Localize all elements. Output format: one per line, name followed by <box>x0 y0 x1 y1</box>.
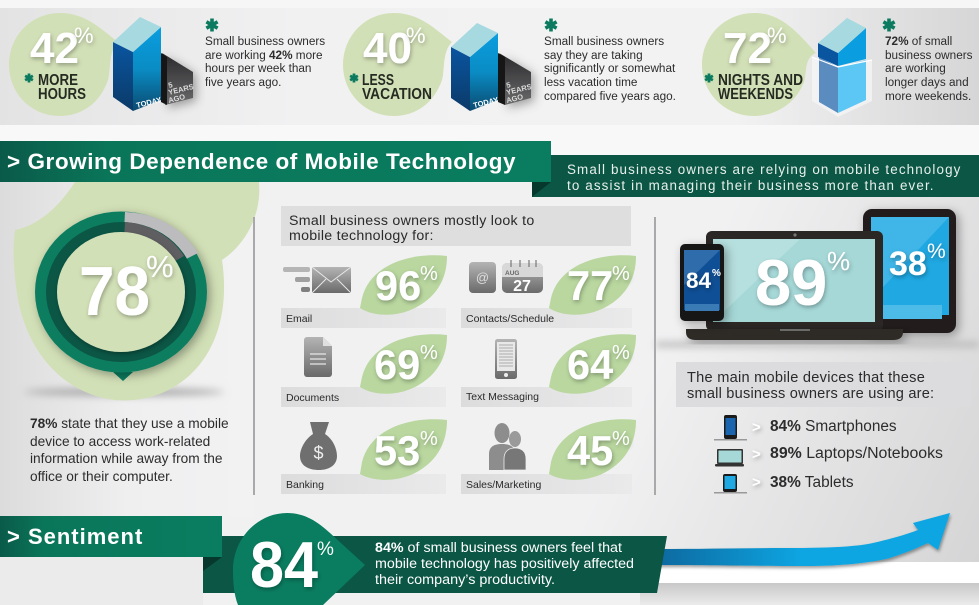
stat: 72% nights and weekends: 72 <box>723 24 772 73</box>
text: 72% explanation: longer days and <box>885 76 969 89</box>
illustration: smartphone 84%: % <box>712 268 721 279</box>
list item: laptops: > <box>752 446 761 463</box>
text: 78% explanation: device to access work-related <box>30 434 210 449</box>
text: 40% explanation: Small business owners <box>544 35 664 48</box>
stat: 40% less vacation: 40 <box>363 24 412 73</box>
item: contacts and schedule 77%: Contacts/Schedule <box>466 313 554 325</box>
icon: document <box>304 337 332 377</box>
stat: 40% less vacation: % <box>406 23 426 48</box>
item: documents 69% <box>281 334 447 407</box>
callout band: 84% productivity: 84 <box>250 528 318 601</box>
donut chart: 78 percent: % <box>146 249 174 284</box>
icon: money bag <box>300 422 337 470</box>
panel heading: main mobile devices: small business owners are using are: <box>687 386 934 402</box>
stat: 42% more hours: % <box>74 23 94 48</box>
item: sales and marketing 45%: % <box>612 428 630 450</box>
shadow strip under devices <box>656 342 979 347</box>
illustration: laptop 89% <box>686 231 903 340</box>
item: banking 53% <box>281 419 447 494</box>
item: contacts and schedule 77%: 77 <box>567 262 613 309</box>
bar chart: 40% today vs 5 years ago: 5 <box>505 80 512 90</box>
illustration: smartphone 84% <box>680 244 724 321</box>
stat: 72% nights and weekends <box>702 13 816 116</box>
item: sales and marketing 45%: 45 <box>567 427 613 474</box>
panel: 78% mobile access <box>14 182 259 484</box>
item: text messaging 64% <box>461 334 636 407</box>
bar chart: 42% today vs 5 years ago: YEARS <box>167 82 195 97</box>
item: documents 69%: Documents <box>286 392 339 404</box>
bar chart: 40% today vs 5 years ago: AGO <box>505 92 524 105</box>
item: text messaging 64%: % <box>612 342 630 364</box>
panel heading: main mobile devices <box>676 362 971 407</box>
bar chart: 40% today vs 5 years ago <box>451 23 533 111</box>
text: 40% explanation: compared five years ago. <box>544 90 676 103</box>
item: banking 53%: % <box>420 428 438 450</box>
icon: address book <box>469 262 496 293</box>
illustration: tablet 38%: % <box>927 240 946 263</box>
heading: sentiment: > Sentiment <box>7 524 143 549</box>
stat: 42% more hours: MORE <box>38 72 78 89</box>
list item: smartphones: > <box>752 419 761 436</box>
item: email 96%: Email <box>286 313 312 325</box>
icon: calendar: 27 <box>513 278 531 295</box>
panel heading: mostly look to mobile technology for: mobile technology for: <box>289 228 434 244</box>
text: 78% explanation: office or their computer. <box>30 469 173 484</box>
item: email 96% <box>281 255 447 328</box>
bar chart: 42% today vs 5 years ago: TODAY <box>135 95 162 110</box>
list item: tablets: 38% Tablets <box>770 474 854 491</box>
icon: envelope <box>283 267 351 293</box>
icon: phone <box>495 339 517 379</box>
stat: 72% nights and weekends: % <box>767 23 787 48</box>
stat: 40% less vacation: VACATION <box>362 86 432 103</box>
bar chart: 40% today vs 5 years ago: TODAY <box>472 95 499 110</box>
item: documents 69%: % <box>420 342 438 364</box>
illustration: laptop 89%: 89 <box>755 246 827 319</box>
arrow: rising blue <box>655 513 950 566</box>
panel heading: mostly look to mobile technology for: Small business owners mostly look to <box>289 213 534 229</box>
donut chart: 78 percent <box>35 212 207 381</box>
item: text messaging 64%: 64 <box>567 341 613 388</box>
stat: 40% less vacation: LESS <box>362 72 394 89</box>
list item: tablets <box>714 474 854 494</box>
bar chart: 40% today vs 5 years ago: YEARS <box>505 82 533 97</box>
heading: growing dependence of mobile technology: > Growing Dependence of Mobile Technology <box>7 149 516 174</box>
text: 40% explanation: significantly or somewhat <box>544 62 676 75</box>
text: 42% explanation: hours per week than <box>205 62 311 75</box>
item: documents 69%: 69 <box>374 341 420 388</box>
illustration: tablet 38%: 38 <box>889 245 927 283</box>
icon: calendar <box>502 260 543 295</box>
illustration: tablet 38% <box>863 209 956 333</box>
text: 42% explanation: are working 42% more <box>205 49 323 62</box>
stat: 72% nights and weekends: WEEKENDS <box>718 86 793 103</box>
text: 72% explanation: more weekends. <box>885 90 971 103</box>
callout band: 84% productivity: 84% of small business owners feel that <box>375 540 622 555</box>
icon: address book: @ <box>476 270 489 285</box>
heading: growing dependence of mobile technology <box>0 141 551 197</box>
icon: money bag: $ <box>313 443 324 463</box>
icon: people <box>489 423 526 470</box>
item: text messaging 64%: Text Messaging <box>466 391 539 403</box>
bar chart: 72% glass column <box>812 18 872 117</box>
list item: smartphones <box>714 415 897 440</box>
illustration: laptop 89%: % <box>827 246 850 276</box>
list item: laptops: 89% Laptops/Notebooks <box>770 445 943 462</box>
stat: 42% more hours <box>9 13 118 116</box>
item: sales and marketing 45%: Sales/Marketing <box>466 479 541 491</box>
item: email 96%: % <box>420 263 438 285</box>
item: sales and marketing 45% <box>461 419 636 494</box>
text: 42% explanation: Small business owners <box>205 35 325 48</box>
callout band: 84% productivity <box>203 513 667 605</box>
callout band: 84% productivity: their company’s productivity. <box>375 572 555 587</box>
stat: 72% nights and weekends: NIGHTS AND <box>718 72 803 89</box>
panel heading: mostly look to mobile technology for <box>281 206 631 246</box>
bar chart: 42% today vs 5 years ago: 5 <box>167 80 174 90</box>
text: 72% explanation: business owners <box>885 49 973 62</box>
list item: smartphones: 84% Smartphones <box>770 418 897 435</box>
text: 42% explanation <box>205 18 325 89</box>
subheading band: mobile technology: Small business owners are relying on mobile technology <box>567 162 961 177</box>
item: banking 53%: 53 <box>374 427 420 474</box>
stat: 40% less vacation <box>343 13 452 116</box>
panel heading: main mobile devices: The main mobile devices that these <box>687 370 925 386</box>
text: 40% explanation: less vacation time <box>544 76 638 89</box>
bar chart: 42% today vs 5 years ago <box>113 17 195 111</box>
text: 78% explanation: 78% state that they use a mobile <box>30 416 229 431</box>
callout band: 84% productivity: mobile technology has positively affected <box>375 556 634 571</box>
item: contacts and schedule 77% <box>461 255 636 328</box>
item: contacts and schedule 77%: % <box>612 263 630 285</box>
bar chart: 42% today vs 5 years ago: AGO <box>167 92 186 105</box>
list item: laptops <box>715 445 943 466</box>
illustration: smartphone 84%: 84 <box>686 268 712 293</box>
text: 40% explanation: say they are taking <box>544 49 643 62</box>
text: 72% explanation: are working <box>885 62 946 75</box>
heading: sentiment <box>0 516 222 571</box>
item: banking 53%: Banking <box>286 479 324 491</box>
list item: tablets: > <box>752 474 761 491</box>
subheading band: mobile technology <box>532 155 979 197</box>
subheading band: mobile technology: to assist in managing their business more than ever. <box>567 178 935 193</box>
icon: calendar: AUG <box>505 270 519 277</box>
text: 72% explanation: 72% of small <box>885 35 952 48</box>
donut chart: 78 percent: 78 <box>79 252 150 330</box>
text: 78% explanation: information while away from the <box>30 451 222 466</box>
stat: 42% more hours: HOURS <box>38 86 86 103</box>
text: 72% explanation <box>883 18 973 103</box>
item: email 96%: 96 <box>375 262 421 309</box>
text: 40% explanation <box>544 18 676 103</box>
text: 42% explanation: five years ago. <box>205 76 281 89</box>
callout band: 84% productivity: % <box>317 539 334 560</box>
text: 78% explanation <box>30 416 229 484</box>
stat: 42% more hours: 42 <box>30 24 79 73</box>
